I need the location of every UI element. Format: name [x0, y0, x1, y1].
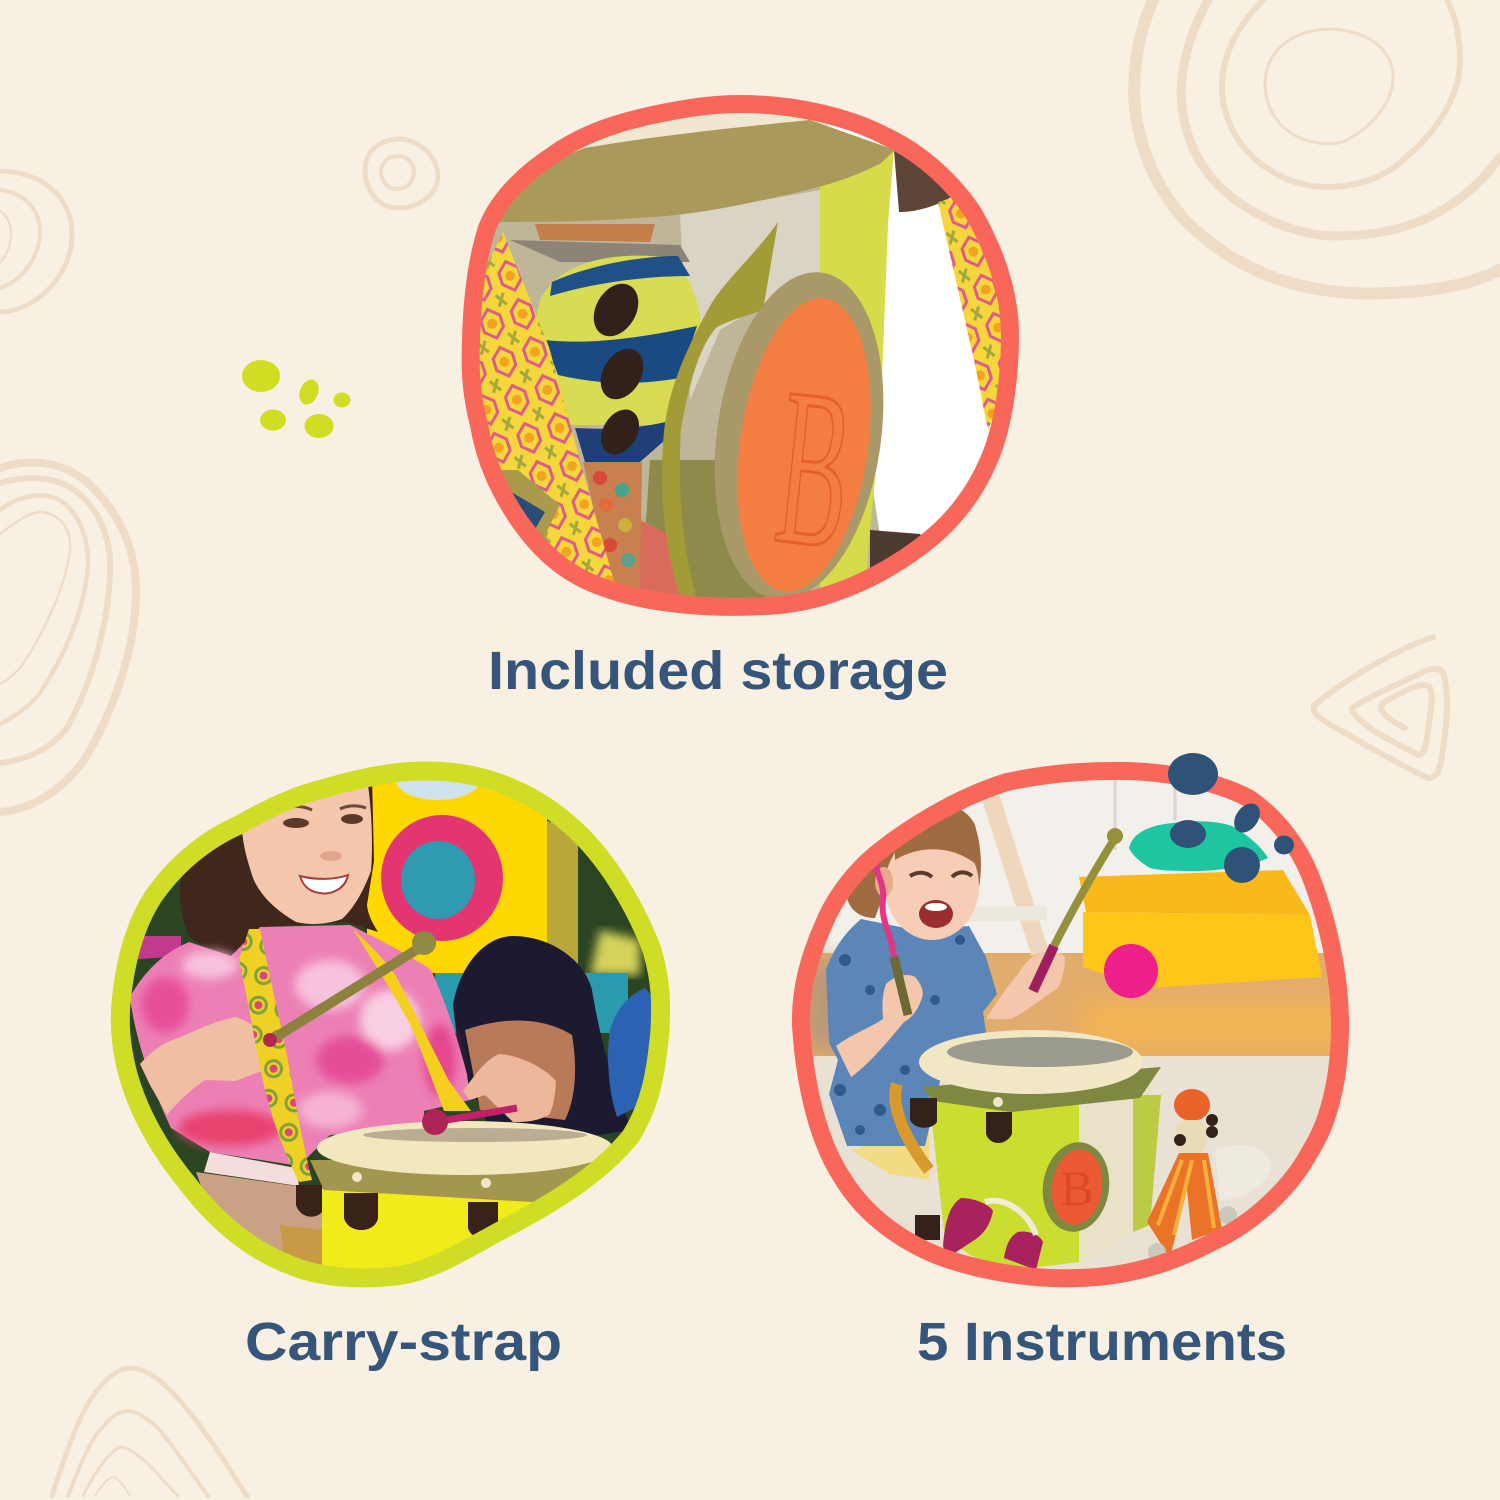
eyes and brows — [278, 806, 366, 828]
speckled white toy — [1215, 1145, 1272, 1200]
strap left — [239, 929, 312, 1182]
drum gold band — [310, 1160, 610, 1203]
navy dots cluster — [1168, 753, 1294, 883]
heading: carry-strap: Carry-strap — [245, 1312, 562, 1372]
emblem — [1037, 1138, 1115, 1236]
floor tone patches — [800, 960, 1350, 1050]
drum body — [929, 1095, 1079, 1272]
blue sleeve — [608, 988, 655, 1117]
contour decoration: left upper — [0, 171, 72, 312]
olive band — [922, 1067, 1161, 1112]
emblem orange face — [737, 298, 871, 592]
mallet 1 — [271, 945, 424, 1040]
dark knob top — [894, 150, 955, 212]
orange figure instrument — [1147, 1153, 1222, 1258]
orange reflection — [535, 224, 655, 242]
toddler pants — [851, 1129, 929, 1180]
knob caps — [352, 1172, 491, 1188]
panel: 5 instruments photo — [790, 753, 1350, 1296]
clear drum body — [487, 186, 880, 591]
drum yellow body — [322, 1189, 533, 1268]
wood floor — [790, 953, 1350, 1058]
left arm — [140, 1017, 261, 1115]
top cream lip — [572, 113, 829, 154]
contour decoration: small ring — [365, 139, 438, 208]
lime panel — [820, 148, 894, 590]
second child — [453, 936, 632, 1150]
drum rim — [317, 1121, 613, 1175]
heading: included storage: Included storage — [488, 641, 948, 701]
panel: included storage photo — [460, 90, 1020, 620]
stars — [834, 935, 965, 1135]
photo: toddler with drum — [790, 760, 1350, 1296]
gold rim — [495, 120, 895, 222]
lime dots cluster — [242, 360, 350, 438]
right forearm — [463, 1054, 556, 1122]
stick right — [1054, 838, 1115, 946]
teal pillow — [1129, 821, 1268, 871]
strap right — [353, 929, 471, 1111]
pink figure instrument — [943, 1198, 993, 1258]
panel: carry-strap photo — [110, 760, 670, 1290]
left strap — [480, 232, 614, 582]
heading: 5 instruments: 5 Instruments — [917, 1312, 1287, 1372]
strap tag — [501, 470, 560, 537]
photo: girl with drum — [130, 780, 652, 1268]
right strap — [938, 195, 1005, 430]
photo: drum close-up — [480, 113, 1001, 598]
face — [242, 778, 372, 924]
ottoman — [1079, 870, 1310, 915]
nose shadow — [320, 851, 342, 861]
hair — [180, 775, 378, 956]
strap — [895, 1084, 929, 1170]
carpet — [790, 1056, 1350, 1296]
drum knobs — [344, 1193, 378, 1230]
yellow playhouse — [367, 770, 547, 973]
contour decoration: triangle spiral — [1314, 637, 1447, 778]
shaker beads — [583, 462, 642, 590]
smile — [300, 875, 348, 893]
cream ring — [985, 1201, 1036, 1235]
stick left — [875, 853, 894, 957]
mallet 2 — [435, 1108, 517, 1122]
frame: coral outline — [801, 771, 1340, 1278]
ladder — [990, 795, 1040, 953]
contour decoration: top right — [1134, 0, 1500, 294]
dark knob bottom — [870, 530, 921, 568]
dark beans — [594, 284, 638, 336]
emblem ring — [714, 272, 884, 597]
hair — [847, 804, 981, 918]
emblem letter: B — [1060, 1160, 1094, 1216]
contour decoration: left big — [0, 463, 136, 812]
egg shaker — [536, 256, 701, 425]
skirt — [196, 1172, 323, 1252]
denim shirt — [826, 919, 997, 1146]
olive side band — [662, 222, 778, 600]
arms and hands — [836, 975, 923, 1077]
tie-dye patches — [141, 951, 456, 1146]
frame: lime outline — [120, 771, 661, 1278]
frame: coral outline — [471, 104, 1010, 607]
clear part — [1079, 1098, 1135, 1262]
pink shirt — [130, 925, 470, 1166]
rim — [919, 1030, 1143, 1094]
contour decoration: bottom left — [52, 1368, 247, 1496]
pink ball — [1104, 944, 1158, 998]
emblem letter: B — [767, 340, 863, 596]
face — [885, 832, 979, 940]
knobs — [910, 1098, 937, 1128]
